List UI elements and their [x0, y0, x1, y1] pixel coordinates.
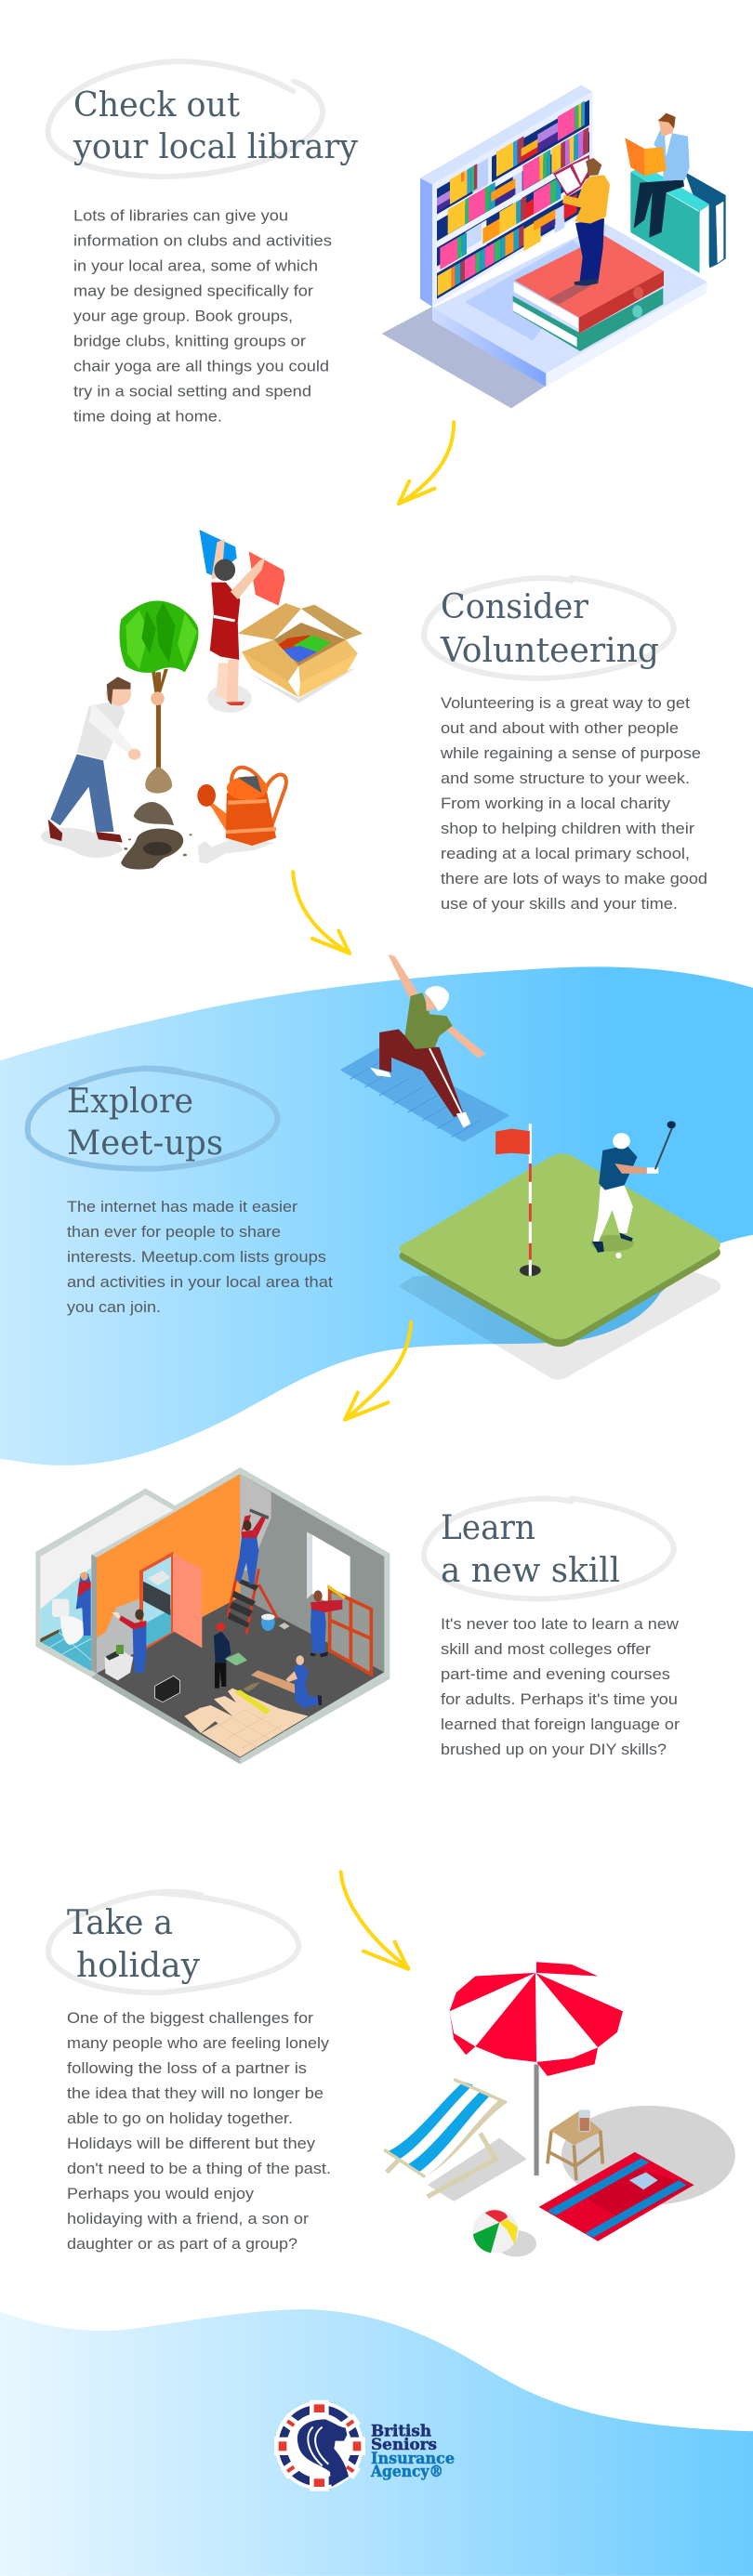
logo: British Seniors Insurance Agency: Insurance [371, 2450, 455, 2468]
logo: British Seniors Insurance Agency: British [371, 2422, 431, 2440]
text block: library: in your local area, some of which [73, 256, 318, 275]
text block: holiday: don't need to be a thing of the past. [67, 2160, 331, 2177]
floor [97, 1597, 384, 1758]
text block: volunteering: Volunteering is a great way to get [441, 694, 690, 712]
heading: Check out your local library: your local library [73, 128, 359, 166]
book stack platform [513, 235, 664, 351]
woman sorting clothes [199, 530, 284, 713]
doorway [139, 1551, 202, 1649]
books on the shelves [437, 98, 588, 302]
illustration: beach scene [384, 1962, 735, 2256]
text block: holiday: holidaying with a friend, a son or [67, 2210, 309, 2228]
text block: library: try in a social setting and spend [73, 383, 311, 400]
text block: holiday: following the loss of a partner is [67, 2059, 307, 2077]
illustration: room renovation [35, 1467, 390, 1764]
deck chair [384, 2080, 527, 2201]
arrow: volunteering to meet-ups [293, 872, 350, 953]
panel: blue wave background behind meet-ups [0, 966, 753, 1465]
heading: Explore Meet-ups: Explore [67, 1083, 193, 1121]
heading: Learn a new skill: a new skill [441, 1552, 620, 1590]
heading: Check out your local library: Check out [73, 86, 241, 125]
text block: volunteering [440, 694, 707, 913]
text block: library: may be designed specifically for [73, 283, 313, 299]
text block: skill: skill and most colleges offer [441, 1640, 651, 1658]
heading: Learn a new skill: Learn [441, 1509, 535, 1547]
text block: holiday: the idea that they will no longer be [67, 2084, 324, 2102]
orange wall [97, 1474, 240, 1679]
logo: British Seniors Insurance Agency [275, 2401, 455, 2490]
arrow: library to volunteering [399, 422, 454, 504]
yoga woman [370, 954, 486, 1128]
worker painting wall [105, 1610, 146, 1680]
man planting tree [41, 601, 198, 858]
parasol [450, 1962, 623, 2175]
arrow: skill to holiday [341, 1872, 408, 1969]
logo: British Seniors Insurance Agency: Agency® [370, 2463, 443, 2481]
text block: holiday: Perhaps you would enjoy [67, 2185, 255, 2202]
bathroom [40, 1494, 174, 1671]
golfer [592, 1121, 676, 1253]
seated man reading on teal books [625, 113, 726, 273]
standing man reading [553, 155, 610, 286]
text block: volunteering: out and about with other people [441, 719, 679, 737]
text block: library: Lots of libraries can give you [73, 206, 288, 225]
text block: skill: learned that foreign language or [441, 1715, 680, 1733]
text block: skill: part-time and evening courses [441, 1665, 670, 1683]
heading: Learn a new skill [424, 1498, 674, 1599]
heading: Take a holiday: Take a [67, 1904, 173, 1942]
text block: volunteering: and some structure to your week. [441, 769, 690, 787]
text block: holiday: One of the biggest challenges for [67, 2009, 313, 2027]
text block: volunteering: while regaining a sense of purpose [440, 744, 701, 762]
text block: volunteering: From working in a local charity [441, 795, 671, 812]
text block: meet-ups: you can join. [67, 1298, 161, 1316]
ladder and painter [228, 1508, 290, 1634]
heading: Consider Volunteering [424, 578, 674, 678]
stool with drink [548, 2109, 602, 2180]
text block: holiday [67, 2009, 331, 2253]
text block: library: information on clubs and activities [73, 232, 332, 249]
foreman [214, 1623, 247, 1689]
window [307, 1531, 373, 1676]
text block: volunteering: reading at a local primary school, [441, 845, 690, 862]
heading: Check out your local library [48, 61, 359, 177]
text block: skill [441, 1615, 680, 1758]
text block: volunteering: shop to helping children with their [441, 820, 694, 837]
logo: British Seniors Insurance Agency: Seniors [371, 2436, 437, 2454]
text block: meet-ups: than ever for people to share [67, 1223, 281, 1241]
text block: library [73, 206, 332, 426]
soil and hole [121, 802, 192, 870]
flag [495, 1124, 532, 1276]
icon: lion roundel [275, 2401, 363, 2490]
text block: library: your age group. Book groups, [73, 307, 293, 325]
icon: watering can [197, 768, 286, 863]
illustration: volunteering scene [41, 530, 363, 870]
toolbox [155, 1676, 179, 1702]
text block: holiday: Holidays will be different but they [67, 2135, 316, 2152]
heading: Consider Volunteering: Volunteering [440, 632, 659, 670]
golf green [399, 1153, 720, 1380]
text block: meet-ups: interests. Meetup.com lists groups [67, 1248, 326, 1266]
beach towel [539, 2152, 694, 2241]
illustration: library bookcase with two readers [382, 85, 726, 408]
text block: library: time doing at home. [73, 407, 222, 426]
text block: volunteering: there are lots of ways to make good [441, 870, 707, 887]
grey wall [240, 1474, 384, 1672]
text block: library: chair yoga are all things you could [73, 357, 329, 375]
open box of clothes [238, 603, 363, 703]
text block: holiday: daughter or as part of a group? [67, 2235, 297, 2253]
heading: Explore Meet-ups [28, 1068, 278, 1169]
worker laying floor [234, 1655, 322, 1715]
illustration: yoga and golf [340, 954, 720, 1380]
text block: holiday: able to go on holiday together. [67, 2109, 293, 2127]
text block: meet-ups [67, 1198, 333, 1316]
heading: Consider Volunteering: Consider [441, 588, 589, 626]
text block: skill: brushed up on your DIY skills? [441, 1741, 667, 1758]
yoga mat [340, 1047, 510, 1142]
heading: Explore Meet-ups: Meet-ups [67, 1124, 223, 1163]
text block: holiday: many people who are feeling lonely [67, 2034, 330, 2052]
beach ball [473, 2209, 536, 2256]
heading: Take a holiday [48, 1892, 298, 1992]
text block: skill: It's never too late to learn a new [441, 1615, 680, 1633]
panel: blue wave footer background [0, 2309, 753, 2576]
text block: volunteering: use of your skills and your time. [441, 895, 678, 913]
heading: Take a holiday: holiday [76, 1947, 201, 1985]
text block: skill: for adults. Perhaps it's time you [441, 1690, 678, 1708]
arrow: meet-ups to skill [345, 1322, 411, 1420]
text block: library: bridge clubs, knitting groups or [73, 333, 306, 349]
text block: meet-ups: and activities in your local area that [67, 1273, 333, 1291]
text block: meet-ups: The internet has made it easier [67, 1198, 297, 1216]
